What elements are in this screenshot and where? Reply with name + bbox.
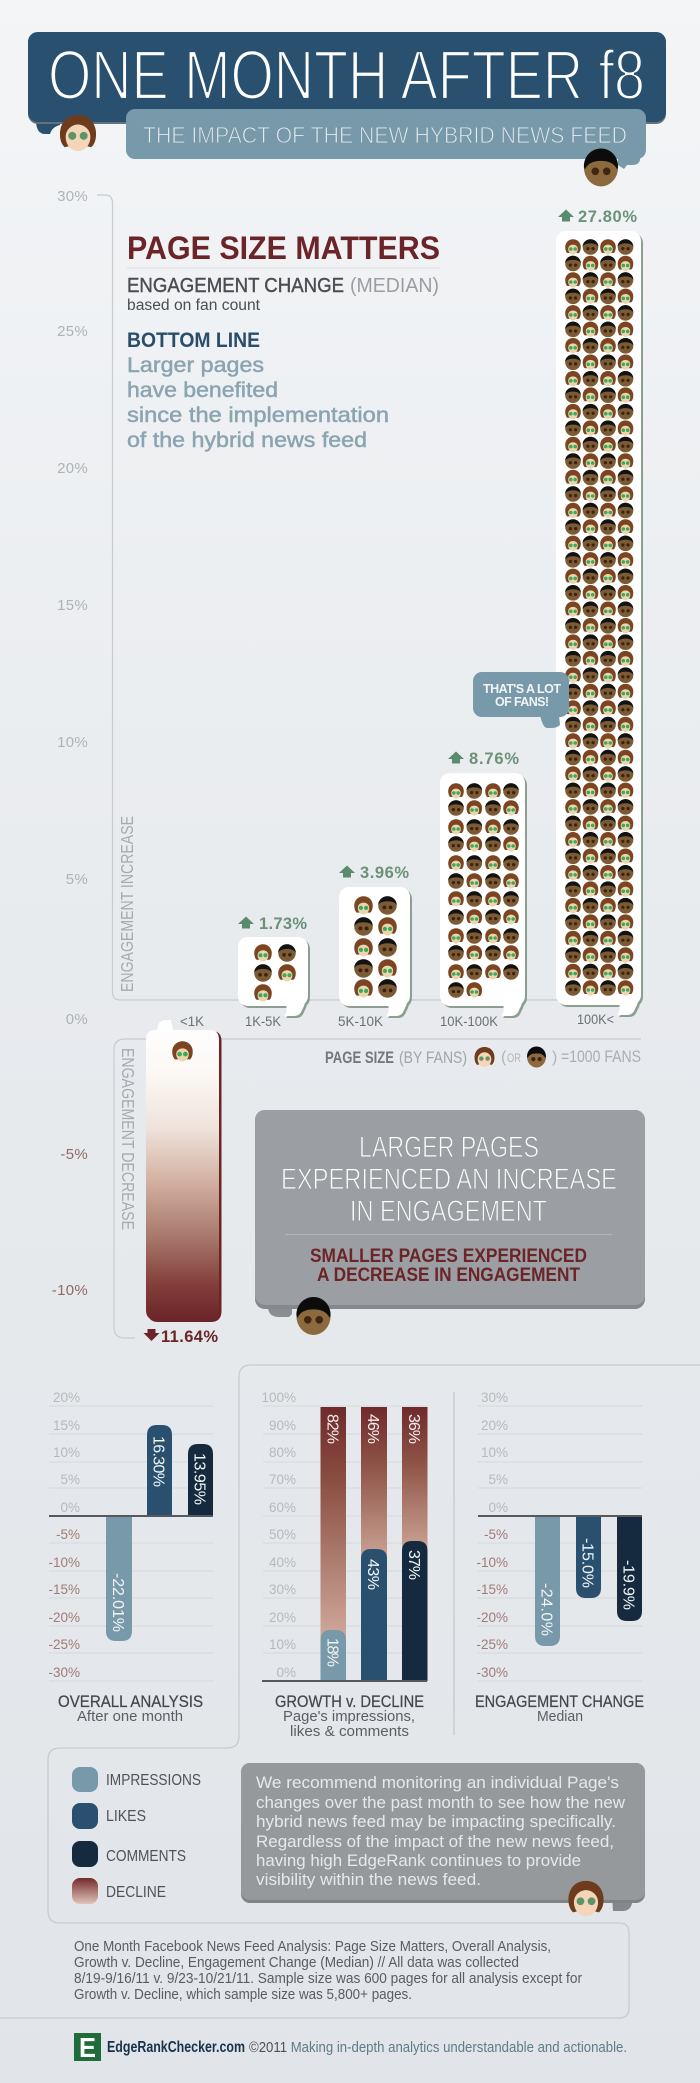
chart: growth v. decline: 90% bbox=[269, 1418, 296, 1433]
stacked bar: comments: 36% bbox=[405, 1414, 422, 1444]
bar: impressions: -22.01% bbox=[109, 1573, 126, 1632]
value: 3.96% bbox=[339, 864, 409, 882]
subhead bbox=[310, 1246, 587, 1286]
bottom line label: BOTTOM LINE bbox=[127, 329, 260, 352]
callout: that's a lot of fans bbox=[473, 672, 569, 728]
chart title bbox=[475, 1692, 644, 1725]
chart: overall analysis: -25% bbox=[48, 1637, 80, 1652]
chart: overall analysis: 10% bbox=[53, 1445, 80, 1460]
axis title: engagement increase: ENGAGEMENT INCREASE bbox=[117, 816, 137, 992]
chart: engagement change: -15% bbox=[476, 1582, 508, 1597]
legend: decline: DECLINE bbox=[106, 1884, 166, 1901]
bar: impressions bbox=[535, 1516, 560, 1646]
bar: 5K-10K bbox=[338, 864, 412, 1029]
bar: comments: 13.95% bbox=[190, 1453, 208, 1505]
bar: likes: -15.0% bbox=[578, 1538, 596, 1588]
bottom line text: of the hybrid news feed bbox=[127, 428, 367, 452]
chart: overall analysis: -15% bbox=[48, 1582, 80, 1597]
recommendation text: visibility within the news feed. bbox=[256, 1870, 481, 1889]
chart: engagement change: 5% bbox=[488, 1472, 508, 1487]
chart: overall analysis: 5% bbox=[60, 1472, 80, 1487]
chart: growth v. decline: 40% bbox=[269, 1555, 296, 1570]
y axis labels: 0% bbox=[66, 1011, 88, 1028]
chart: engagement change: -30% bbox=[476, 1665, 508, 1680]
recommendation text: We recommend monitoring an individual Page's bbox=[256, 1773, 619, 1792]
bottom line text bbox=[127, 353, 389, 452]
legend: likes: LIKES bbox=[106, 1808, 146, 1825]
chart title: likes & comments bbox=[290, 1723, 409, 1740]
fans bbox=[565, 239, 633, 996]
chart title bbox=[58, 1692, 203, 1725]
subtitle bubble bbox=[126, 109, 646, 169]
callout: that's a lot of fans: OF FANS! bbox=[495, 695, 549, 709]
header banner bbox=[28, 32, 666, 186]
chart title: ENGAGEMENT CHANGE bbox=[475, 1692, 644, 1711]
stacked bar: comments: 37% bbox=[405, 1550, 422, 1580]
stacked bar: impressions bbox=[320, 1407, 346, 1681]
headline: IN ENGAGEMENT bbox=[350, 1195, 547, 1228]
logo bbox=[74, 2032, 101, 2063]
bar: likes bbox=[147, 1425, 172, 1516]
chart: growth v. decline: 80% bbox=[269, 1445, 296, 1460]
bar: comments bbox=[188, 1444, 213, 1516]
legend: comments: COMMENTS bbox=[106, 1848, 186, 1865]
stacked bar: likes: 43% bbox=[364, 1559, 381, 1590]
chart: growth v. decline: 20% bbox=[269, 1610, 296, 1625]
headline: LARGER PAGES bbox=[359, 1131, 539, 1164]
footnote: Growth v. Decline, which sample size was 5,800+ pages. bbox=[74, 1987, 412, 2003]
chart: engagement change: -20% bbox=[476, 1610, 508, 1625]
callout: recommendation bbox=[241, 1763, 645, 1916]
chart: overall analysis: -10% bbox=[48, 1555, 80, 1570]
chart: engagement change: 30% bbox=[481, 1390, 508, 1405]
label: 5K-10K bbox=[338, 1013, 384, 1029]
footer bbox=[74, 2032, 627, 2063]
chart: engagement change: 10% bbox=[481, 1445, 508, 1460]
legend: page size by fans: ( bbox=[501, 1049, 507, 1066]
callout: larger pages bbox=[255, 1110, 645, 1335]
label: under 1K: <1K bbox=[180, 1013, 205, 1029]
icon: frowning fan bbox=[172, 1041, 193, 1061]
chart: growth v. decline: 100% bbox=[261, 1390, 296, 1405]
legend: page size by fans: =1000 FANS bbox=[561, 1048, 641, 1066]
chart title: Page's impressions, bbox=[283, 1708, 415, 1725]
bottom line text: since the implementation bbox=[127, 403, 389, 427]
stacked bar: likes bbox=[361, 1407, 387, 1681]
heading block bbox=[127, 230, 440, 452]
stacked bar: likes: 46% bbox=[364, 1414, 381, 1444]
y axis labels: 30% bbox=[57, 188, 88, 205]
icon: man avatar bbox=[296, 1297, 331, 1335]
value: 1.73%: 1.73% bbox=[259, 915, 307, 933]
chart: engagement change: -5% bbox=[484, 1527, 508, 1542]
legend: page size by fans bbox=[325, 1046, 641, 1068]
heading: page size matters: PAGE SIZE MATTERS bbox=[127, 230, 440, 266]
icon: woman fan bbox=[475, 1047, 494, 1067]
bar: 10K-100K bbox=[440, 750, 527, 1029]
bar: 100K+ bbox=[556, 208, 643, 1027]
legend: page size by fans: (BY FANS) bbox=[399, 1048, 467, 1067]
chart: growth v. decline: 60% bbox=[269, 1500, 296, 1515]
chart: overall analysis: 20% bbox=[53, 1390, 80, 1405]
bar: 1K-5K bbox=[238, 915, 310, 1029]
icon: woman avatar bbox=[60, 115, 96, 151]
colour legend bbox=[72, 1767, 201, 1904]
chart: growth v. decline: 0% bbox=[276, 1665, 296, 1680]
stacked bar: comments bbox=[402, 1407, 428, 1681]
stacked bar: impressions: 82% bbox=[324, 1414, 340, 1444]
legend: page size by fans: OR bbox=[507, 1051, 521, 1065]
chart: overall analysis: -20% bbox=[48, 1610, 80, 1625]
subheading: median: (MEDIAN) bbox=[350, 274, 439, 297]
section frames bbox=[0, 1365, 700, 2018]
chart: engagement change: -10% bbox=[476, 1555, 508, 1570]
fans bbox=[448, 783, 519, 998]
chart: overall analysis: -30% bbox=[48, 1665, 80, 1680]
y axis labels: -10% bbox=[52, 1282, 88, 1299]
chart: growth v. decline: 10% bbox=[269, 1637, 296, 1652]
subhead: A DECREASE IN ENGAGEMENT bbox=[317, 1265, 580, 1286]
chart title: Median bbox=[537, 1708, 583, 1725]
legend: impressions: IMPRESSIONS bbox=[106, 1772, 201, 1789]
recommendation text: hybrid news feed may be impacting specifically. bbox=[256, 1812, 616, 1831]
bar: under 1K bbox=[144, 1013, 222, 1346]
recommendation text: changes over the past month to see how the new bbox=[256, 1793, 626, 1812]
chart: overall analysis: 0% bbox=[60, 1500, 80, 1515]
icon: woman avatar bbox=[568, 1881, 604, 1916]
chart axes bbox=[97, 195, 641, 1338]
icon: man fan bbox=[527, 1046, 546, 1068]
y axis labels: -5% bbox=[60, 1146, 88, 1163]
legend: page size by fans: ) bbox=[552, 1049, 557, 1066]
recommendation text: having high EdgeRank continues to provide bbox=[256, 1851, 581, 1870]
chart title: OVERALL ANALYSIS bbox=[58, 1692, 203, 1711]
chart title: After one month bbox=[77, 1708, 183, 1725]
label: 100K< bbox=[577, 1011, 614, 1027]
bar: likes: 16.30% bbox=[150, 1436, 166, 1487]
y axis labels: 15% bbox=[57, 597, 88, 614]
chart: growth v. decline: 70% bbox=[269, 1472, 296, 1487]
label: 10K-100K bbox=[440, 1013, 499, 1029]
chart: engagement change: 20% bbox=[481, 1418, 508, 1433]
axis title: engagement decrease: ENGAGEMENT DECREASE bbox=[118, 1048, 138, 1230]
fans bbox=[254, 944, 296, 1002]
callout: that's a lot of fans: THAT'S A LOT bbox=[483, 682, 561, 696]
y axis labels bbox=[52, 188, 88, 1299]
footnote: 8/19-9/16/11 v. 9/23-10/21/11. Sample size was 600 pages for all analysis except for bbox=[74, 1971, 582, 1987]
fans bbox=[354, 896, 397, 998]
bar: comments: -19.9% bbox=[620, 1560, 636, 1610]
chart: overall analysis: 15% bbox=[53, 1418, 80, 1433]
y axis labels: 10% bbox=[57, 734, 88, 751]
bar: comments bbox=[617, 1516, 642, 1621]
value: -11.64%: 11.64% bbox=[161, 1328, 218, 1346]
chart: growth v. decline: 30% bbox=[269, 1582, 296, 1597]
value: 3.96%: 3.96% bbox=[360, 864, 409, 882]
value: 8.76%: 8.76% bbox=[469, 750, 519, 768]
bar: likes bbox=[576, 1516, 601, 1598]
chart: overall analysis bbox=[48, 1390, 213, 1725]
chart: overall analysis: -5% bbox=[56, 1527, 80, 1542]
chart title: GROWTH v. DECLINE bbox=[275, 1692, 424, 1711]
footnote: Growth v. Decline, Engagement Change (Median) // All data was collected bbox=[74, 1955, 519, 1971]
footnote bbox=[74, 1939, 582, 2003]
recommendation text: Regardless of the impact of the new news feed, bbox=[256, 1832, 614, 1851]
chart: engagement change: 0% bbox=[488, 1500, 508, 1515]
bar: impressions: -24.0% bbox=[538, 1583, 554, 1636]
y axis labels: 25% bbox=[57, 323, 88, 340]
bar: impressions bbox=[106, 1516, 132, 1641]
site name: EdgeRankChecker.com bbox=[107, 2039, 245, 2056]
label: 1K-5K bbox=[245, 1013, 282, 1029]
chart: growth v. decline: 50% bbox=[269, 1527, 296, 1542]
chart: growth v. decline bbox=[261, 1390, 428, 1740]
bottom line text: have benefited bbox=[127, 378, 278, 402]
logo: E bbox=[79, 2032, 96, 2063]
footnote: One Month Facebook News Feed Analysis: Page Size Matters, Overall Analysis, bbox=[74, 1939, 551, 1955]
headline: EXPERIENCED AN INCREASE bbox=[281, 1163, 617, 1196]
legend: page size by fans: PAGE SIZE bbox=[325, 1048, 394, 1067]
chart title bbox=[275, 1692, 424, 1740]
chart: engagement change: -25% bbox=[476, 1637, 508, 1652]
chart: engagement change bbox=[475, 1390, 644, 1725]
recommendation text bbox=[256, 1773, 626, 1889]
headline bbox=[281, 1131, 617, 1228]
note: based on fan count: based on fan count bbox=[127, 297, 261, 314]
subhead: SMALLER PAGES EXPERIENCED bbox=[310, 1246, 587, 1267]
value: 27.80%: 27.80% bbox=[578, 208, 637, 226]
y axis labels: 20% bbox=[57, 460, 88, 477]
bottom line text: Larger pages bbox=[127, 353, 264, 377]
y axis labels: 5% bbox=[66, 871, 88, 888]
copyright: ©2011 Making in-depth analytics understandable and actionable. bbox=[249, 2039, 627, 2056]
title bubble bbox=[28, 32, 666, 134]
stacked bar: impressions: 18% bbox=[324, 1638, 340, 1667]
icon: man avatar bbox=[584, 148, 618, 186]
subtitle: THE IMPACT OF THE NEW HYBRID NEWS FEED bbox=[143, 122, 627, 148]
subheading: engagement change: ENGAGEMENT CHANGE bbox=[127, 274, 344, 297]
